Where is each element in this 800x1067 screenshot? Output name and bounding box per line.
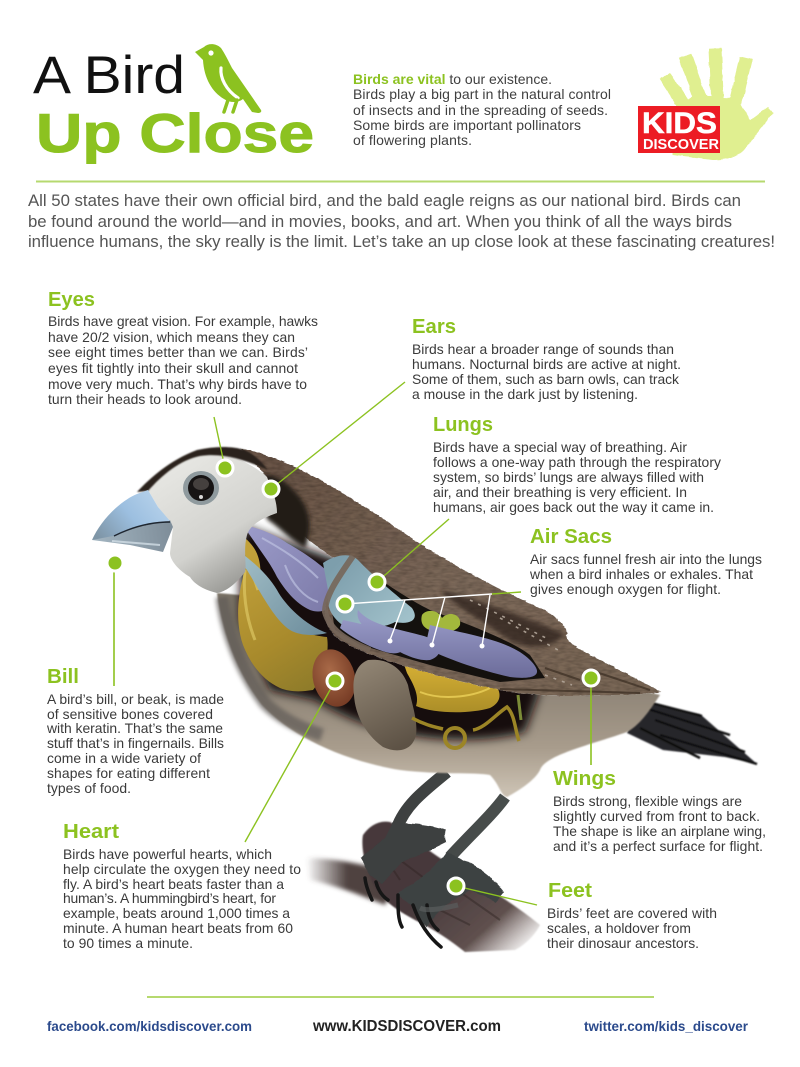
- wing rim: [325, 556, 370, 650]
- branch: [307, 822, 540, 952]
- footer links: www.KIDSDISCOVER.com: [312, 1018, 501, 1035]
- connector: bill: [113, 570, 115, 686]
- text block: eyes: see eight times better than we can. Birds’: [48, 344, 308, 360]
- text block: lungs: humans, air goes back out the way it came in.: [433, 499, 714, 515]
- belly: [217, 593, 660, 797]
- text block: ears: Birds hear a broader range of sounds than: [412, 341, 674, 357]
- text block: ears: humans. Nocturnal birds are active at night.: [412, 356, 681, 372]
- footer links: [47, 1018, 749, 1035]
- title: [33, 46, 314, 164]
- text block: heart: fly. A bird’s heart beats faster than a: [63, 876, 284, 892]
- logo: Kids Discover: [638, 48, 774, 160]
- gizzard: [353, 660, 416, 750]
- text block: bill: with keratin. That’s the same: [46, 720, 223, 736]
- text block: heart: Birds have powerful hearts, which: [63, 846, 272, 862]
- intro text: [28, 191, 775, 251]
- text block: bill: [46, 666, 224, 796]
- text block: eyes: Eyes: [48, 289, 95, 311]
- text block: lungs: air, and their breathing is very efficient. In: [433, 484, 687, 500]
- dark wing feathers: [440, 590, 565, 647]
- text block: wings: and it’s a perfect surface for flight.: [553, 838, 763, 854]
- text block: wings: The shape is like an airplane wing,: [553, 823, 766, 839]
- dark neck patch: [258, 475, 310, 548]
- intro text: influence humans, the sky really is the limit. Let’s take an up close look at these fascinating creatures!: [28, 232, 775, 251]
- text block: lungs: follows a one-way path through the respiratory: [433, 454, 721, 470]
- title: Up Close: [36, 102, 314, 164]
- dark cap: [137, 447, 268, 492]
- text block: air sacs: gives enough oxygen for flight.: [530, 581, 721, 597]
- text block: eyes: turn their heads to look around.: [48, 391, 242, 407]
- text block: bill: Bill: [47, 666, 79, 688]
- text block: wings: Wings: [553, 768, 616, 790]
- eye: [183, 471, 219, 505]
- red box: [638, 106, 720, 153]
- text block: birds are vital: of flowering plants.: [353, 132, 472, 148]
- connector: eyes: [214, 417, 225, 468]
- text block: ears: Some of them, such as barn owls, can track: [412, 371, 679, 387]
- head: [148, 454, 277, 593]
- logo: Kids Discover: KIDS: [642, 107, 717, 140]
- title: A Bird: [33, 46, 185, 105]
- text block: bill: of sensitive bones covered: [47, 706, 213, 722]
- text block: air sacs: when a bird inhales or exhales. That: [529, 566, 753, 582]
- text block: eyes: Birds have great vision. For example, hawks: [48, 313, 318, 329]
- text block: feet: their dinosaur ancestors.: [547, 935, 699, 951]
- connector: wings: [590, 678, 592, 765]
- wing and back: [240, 448, 662, 696]
- text block: heart: help circulate the oxygen they need to: [63, 861, 301, 877]
- text block: eyes: have 20/2 vision, which means they can: [48, 329, 295, 345]
- intestines: [400, 653, 521, 748]
- text block: birds are vital: Some birds are important pollinators: [353, 117, 581, 133]
- connector: air sacs: [345, 592, 521, 648]
- text block: air sacs: [529, 526, 762, 597]
- trachea: [227, 543, 327, 635]
- text block: bill: come in a wide variety of: [47, 750, 201, 766]
- body cavity: [240, 525, 540, 740]
- text block: birds are vital: [353, 71, 611, 148]
- footer links: facebook.com/kidsdiscover.com: [47, 1019, 252, 1034]
- connector: lungs: [377, 519, 449, 582]
- small green organ: [421, 611, 460, 631]
- footer links: twitter.com/kids_discover: [584, 1019, 749, 1034]
- text block: bill: types of food.: [47, 780, 131, 796]
- text block: birds are vital: Birds are vital to our existence.: [353, 71, 552, 87]
- text block: ears: a mouse in the dark just by listening.: [412, 386, 638, 402]
- heart: [307, 645, 361, 711]
- tail: [627, 700, 757, 764]
- text block: bill: stuff that’s in fingernails. Bills: [47, 735, 224, 751]
- chest shadow band: [222, 597, 322, 735]
- text block: wings: Birds strong, flexible wings are: [553, 793, 742, 809]
- connector: feet: [456, 886, 537, 905]
- text block: heart: to 90 times a minute.: [63, 935, 193, 951]
- text block: feet: Birds’ feet are covered with: [547, 905, 717, 921]
- text block: lungs: [433, 414, 721, 515]
- logo: Kids Discover: DISCOVER: [643, 136, 719, 153]
- wing window: [330, 560, 545, 682]
- wing speckles: [500, 668, 650, 693]
- intro text: All 50 states have their own official bird, and the bald eagle reigns as our national bird. Birds can: [28, 191, 741, 210]
- text block: heart: minute. A human heart beats from 60: [63, 920, 293, 936]
- text block: eyes: move very much. That’s why birds have to: [48, 376, 307, 392]
- intro text: be found around the world—and in movies, books, and art. When you think of all the ways birds: [28, 212, 732, 231]
- text block: eyes: [48, 289, 318, 407]
- text block: feet: [547, 880, 717, 951]
- text block: bill: A bird’s bill, or beak, is made: [47, 691, 224, 707]
- text block: heart: example, beats around 1,000 times a: [63, 905, 290, 921]
- legs and feet: [360, 772, 505, 947]
- connector: ears: [271, 382, 405, 489]
- air sac: blue: [323, 555, 415, 628]
- text block: heart: human’s. A hummingbird’s heart, for: [63, 890, 276, 906]
- lungs: [243, 525, 339, 611]
- text block: lungs: system, so birds’ lungs are always filled with: [433, 469, 704, 485]
- beak: [92, 490, 173, 552]
- icon: green bird: [195, 44, 261, 113]
- icon: hand print: [665, 48, 774, 160]
- text block: birds are vital: of insects and in the spreading of seeds.: [353, 102, 608, 118]
- text block: air sacs: Air Sacs: [530, 526, 612, 548]
- text block: heart: [63, 821, 301, 951]
- text block: wings: slightly curved from front to back.: [553, 808, 760, 824]
- text block: ears: Ears: [412, 316, 456, 338]
- text block: eyes: eyes fit tightly into their skull and cannot: [48, 360, 298, 376]
- text block: ears: [412, 316, 681, 402]
- connector: heart: [245, 681, 335, 842]
- text block: feet: scales, a holdover from: [547, 920, 691, 936]
- text block: bill: shapes for eating different: [47, 765, 210, 781]
- marker dots: [107, 460, 599, 894]
- text block: wings: [553, 768, 766, 854]
- text block: heart: Heart: [63, 821, 119, 843]
- text block: lungs: Birds have a special way of breathing. Air: [433, 439, 687, 455]
- air sacs: purple: [340, 610, 537, 678]
- text block: feet: Feet: [548, 880, 592, 902]
- text block: air sacs: Air sacs funnel fresh air into the lungs: [530, 551, 762, 567]
- text block: birds are vital: Birds play a big part in the natural control: [353, 86, 611, 102]
- bird illustration: [92, 447, 757, 952]
- liver: [237, 533, 328, 691]
- text block: lungs: Lungs: [433, 414, 493, 436]
